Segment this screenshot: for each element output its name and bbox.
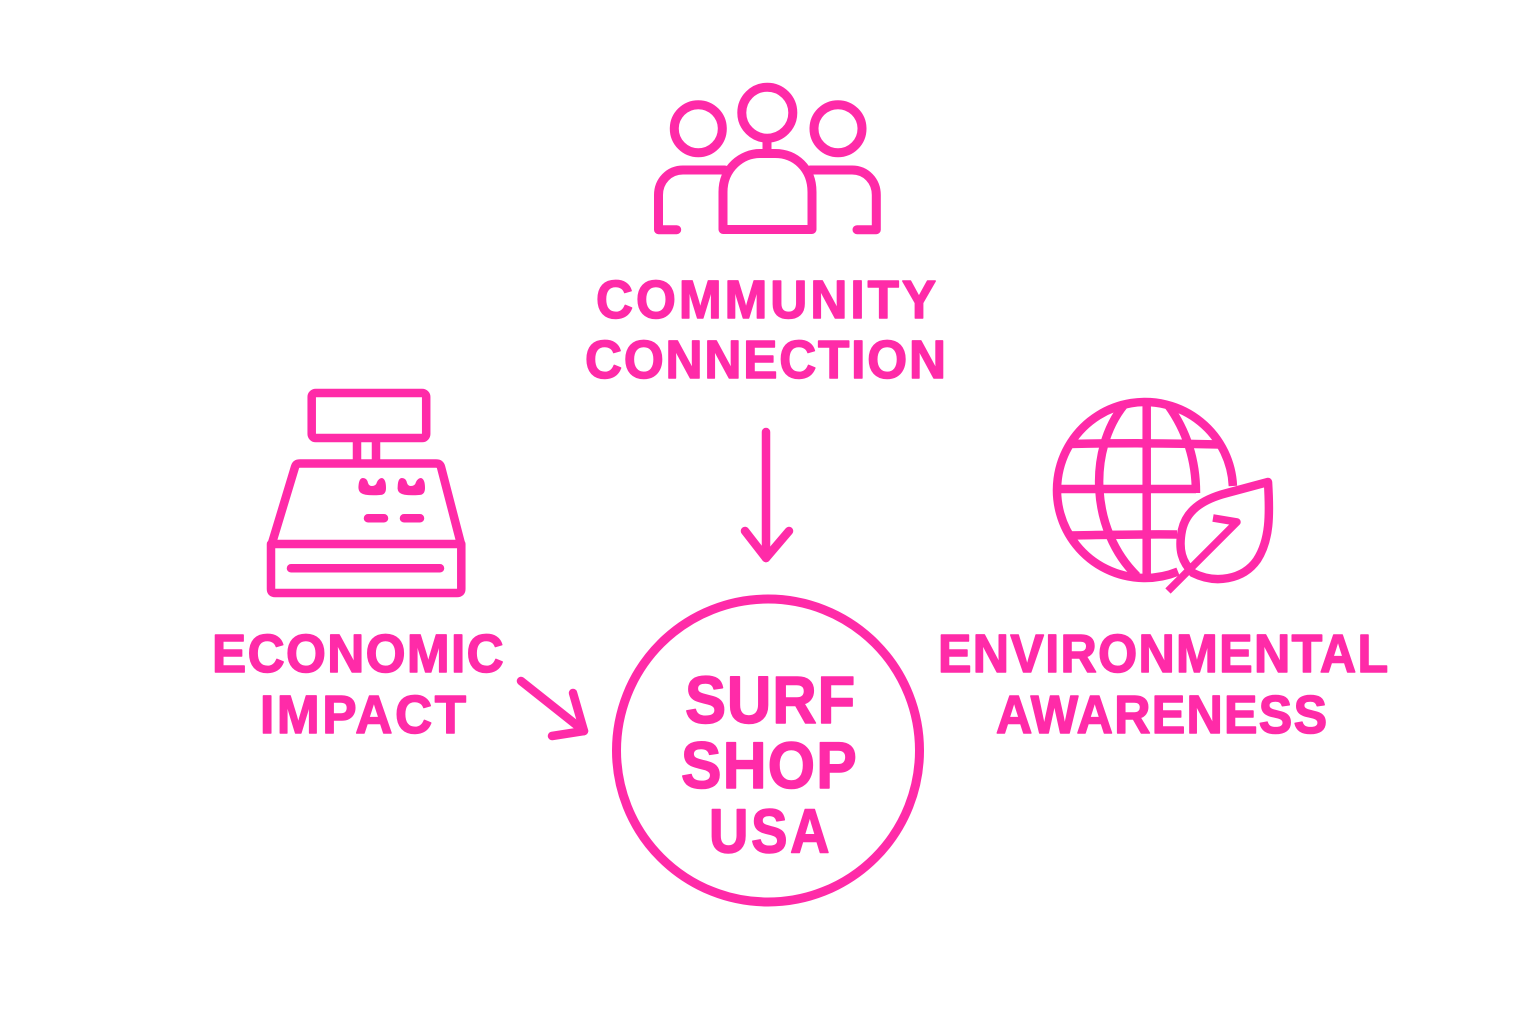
icon: community people: [658, 87, 876, 230]
heading: community connection: COMMUNITY: [596, 270, 936, 330]
heading: economic impact: [212, 624, 504, 745]
center circle: surf shop usa: [616, 599, 920, 902]
center circle: surf shop usa: SHOP: [681, 730, 857, 803]
heading: community connection: [585, 270, 946, 390]
center circle: surf shop usa: USA: [709, 797, 830, 866]
heading: environmental awareness: AWARENESS: [996, 685, 1327, 745]
icon: cash register: [271, 393, 461, 593]
arrow: community to surf shop: [745, 432, 789, 558]
heading: environmental awareness: ENVIRONMENTAL: [938, 624, 1388, 684]
arrow: economic impact to surf shop: [521, 681, 584, 736]
heading: economic impact: IMPACT: [260, 685, 466, 745]
heading: community connection: CONNECTION: [585, 330, 946, 390]
icon: globe with leaf: [1057, 402, 1269, 591]
heading: environmental awareness: [938, 624, 1388, 745]
center circle: surf shop usa: SURF: [685, 663, 855, 738]
heading: economic impact: ECONOMIC: [212, 624, 504, 684]
